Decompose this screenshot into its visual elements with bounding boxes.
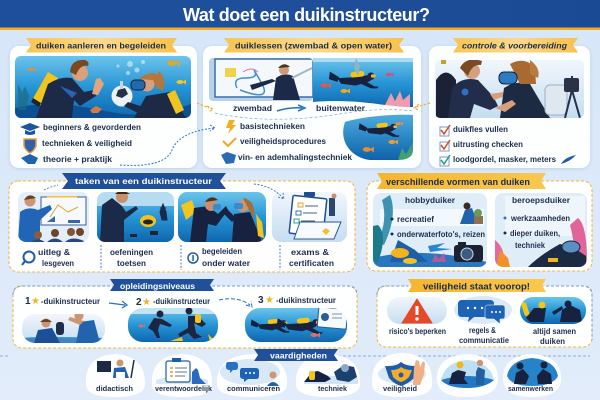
skill: didactisch [86, 354, 145, 397]
skill: techniek: techniek [318, 384, 348, 393]
labels: zwembad and buitenwater: zwembad [233, 103, 272, 113]
icon: shield [24, 139, 36, 153]
illustration: reef diver [340, 114, 413, 160]
list: aanleren: beginners & gevorderden [43, 122, 141, 132]
illustration: buddy divers [520, 297, 586, 324]
skill: diver and instructor [437, 354, 498, 397]
title banner: Wat doet een duikinstructeur? [183, 5, 430, 25]
icon: magnifier [22, 252, 34, 265]
caption group: tasks: begeleiden [202, 246, 242, 256]
icon: check [223, 138, 236, 146]
card: beroepsduiker: techniek [515, 240, 545, 250]
illustration: underwater guidance [178, 192, 266, 242]
list: duiklessen [221, 120, 352, 164]
level 3 [245, 295, 348, 342]
caption group: tasks: oefeningen [110, 247, 153, 257]
banner: controle [453, 38, 578, 52]
captions: safety: duiken [540, 336, 565, 346]
banner: controle: controle & voorbereiding [462, 40, 568, 50]
illustration: whiteboard lesson [209, 58, 313, 101]
icon: warning triangle [387, 297, 447, 324]
caption group: tasks [22, 246, 334, 268]
banner: vormen [377, 173, 546, 189]
skill: verantwoordelijk [152, 354, 213, 397]
skill: communiceren [217, 354, 287, 397]
dashed skills line [0, 355, 590, 357]
arrow: zwembad to buitenwater [277, 105, 305, 111]
labels: zwembad and buitenwater [233, 103, 366, 113]
panel: controle en voorbereiding [429, 38, 590, 168]
illustration: equipment check [435, 54, 584, 118]
illustration: level 3 divers [245, 307, 348, 342]
icon: lightning bolt [226, 120, 236, 134]
banner: veiligheid [408, 279, 546, 292]
icon: info circle [188, 253, 198, 263]
card: hobbyduiker [373, 193, 487, 267]
captions: safety: altijd samen [533, 326, 576, 336]
illustration: open water diver [313, 58, 413, 112]
wave: dashed divider inside lessons panel [215, 110, 413, 119]
icon: graduation cap [20, 123, 40, 135]
dividers between tasks [101, 245, 280, 270]
arrow: level 1 to 2 [109, 301, 127, 308]
banner: vaardigheden: vaardigheden [270, 350, 327, 360]
list: aanleren: theorie + praktijk [43, 154, 112, 164]
icon: books [221, 152, 236, 164]
skill: verantwoordelijk: verentwoordelijk [155, 384, 213, 393]
caption group: tasks: exams & [291, 247, 329, 257]
list: duiklessen: vin- en ademhalingstechniek [238, 152, 352, 162]
card: beroepsduiker: werkzaamheden [510, 213, 570, 223]
captions: safety: communicatie [459, 335, 509, 345]
card: beroepsduiker: beroepsduiker [512, 195, 571, 205]
illustration: level 1 instruction [22, 312, 105, 343]
illustration: instructor and student with ball [15, 56, 191, 118]
skill: veiligheid [372, 353, 432, 397]
banner: opleidingsniveaus: opleidingsniveaus [120, 281, 195, 291]
arrow: level 2 to 3 [219, 299, 252, 307]
level 3: 3 [258, 295, 264, 306]
icon: check box 3 [440, 155, 450, 166]
banner: vaardigheden [254, 349, 338, 361]
skill: samenwerken [503, 354, 561, 397]
level 3: -duikinstructeur [276, 295, 337, 305]
list: duiklessen: basistechnieken [240, 121, 305, 131]
card: hobbyduiker: recreatief [397, 214, 434, 224]
illustration: exercises and tests [97, 191, 174, 242]
illustration: level 2 divers [128, 308, 218, 342]
labels: zwembad and buitenwater: buitenwater [316, 103, 366, 113]
level 2: -duikinstructeur [153, 296, 211, 306]
banner: duiklessen [224, 38, 404, 52]
card: hobbyduiker: onderwaterfoto's, reizen [397, 229, 485, 239]
banner: veiligheid: veiligheid staat voorop! [423, 282, 530, 292]
list: checks: loodgordel, masker, meters [453, 154, 556, 164]
arrow: orange panel link left [197, 103, 213, 112]
icon: check box 2 [440, 140, 450, 151]
banner: duiken aanleren: duiken aanleren en begeleiden [36, 40, 166, 50]
banner: duiklessen: duiklessen (zwembad & open water) [235, 40, 392, 50]
list: aanleren: technieken & veiligheid [42, 138, 132, 148]
icon: fin [561, 155, 576, 164]
banner: opleidingsniveaus [110, 279, 214, 291]
level 2 [128, 296, 218, 342]
level 1: -duikinstructeur [41, 296, 101, 306]
level 1: ★ [31, 296, 40, 307]
list: aanleren [20, 122, 141, 164]
caption group: tasks: certificaten [289, 258, 334, 268]
icon: book [21, 154, 38, 164]
banner: duiken aanleren [26, 38, 177, 52]
list: checks: uitrusting checken [453, 139, 523, 149]
caption group: tasks: uitleg & [38, 247, 70, 257]
title banner [0, 0, 600, 30]
level 1 [22, 296, 105, 343]
arrow: task left [44, 185, 58, 190]
illustration: classroom explanation [18, 192, 89, 243]
arrow: blue panel link left [120, 125, 215, 165]
icon: speech bubbles [454, 296, 512, 324]
level 2: ★ [142, 297, 151, 308]
card: hobbyduiker: hobbyduiker [405, 195, 456, 205]
list: checks: duikfles vullen [453, 124, 508, 134]
icon: check box 1 [440, 125, 450, 136]
panel: duiken aanleren en begeleiden [10, 38, 197, 168]
caption group: tasks: onder water [202, 258, 251, 268]
caption group: tasks: lesgeven [42, 258, 74, 268]
arrow: orange panel link right [414, 103, 430, 110]
banner: taken: taken van een duikinstructeur [75, 176, 213, 186]
panel: taken van een duikinstructeur [9, 173, 355, 272]
list: checks [440, 124, 576, 166]
level 2: 2 [136, 297, 142, 308]
illustration: exams and certificates [272, 191, 347, 242]
skill: communiceren: communiceren [227, 384, 280, 393]
caption group: tasks: toetsen [117, 258, 146, 268]
banner: taken [62, 173, 226, 189]
panel: duiklessen [203, 38, 421, 168]
panel: veiligheid staat voorop [377, 279, 592, 347]
captions: safety: regels & [469, 325, 496, 335]
skill: didactisch: didactisch [96, 384, 133, 393]
card: beroepsduiker [495, 193, 587, 267]
banner: vormen: verschillende vormen van duiken [386, 177, 530, 187]
captions: safety: risico's beperken [389, 326, 446, 336]
skill: samenwerken: samenwerken [508, 384, 553, 393]
arrow: task right [254, 184, 284, 199]
list: duiklessen: veiligheidsprocedures [240, 136, 326, 146]
skill: techniek [296, 354, 360, 397]
panel: opleidingsniveaus [13, 279, 357, 348]
captions: safety [389, 325, 576, 346]
card: beroepsduiker: dieper duiken, [510, 228, 560, 238]
skill: veiligheid: veiligheid [383, 384, 417, 393]
level 1: 1 [25, 296, 31, 307]
panel: verschillende vormen van duiken [367, 173, 592, 271]
level 3: ★ [265, 295, 274, 306]
